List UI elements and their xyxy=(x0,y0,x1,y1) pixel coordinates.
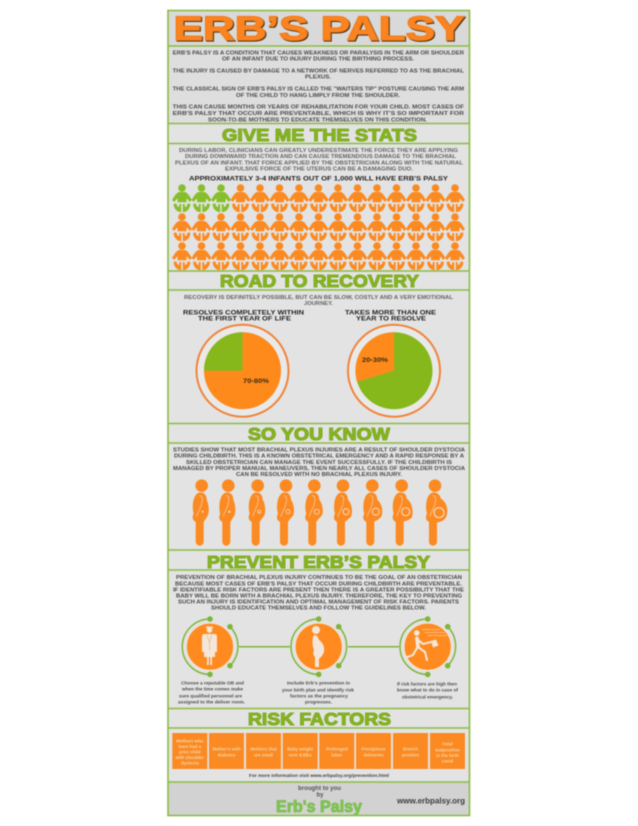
connector lines xyxy=(239,646,399,648)
pictogram: infants xyxy=(172,184,465,270)
section frame and dividers xyxy=(168,10,470,816)
risk factor boxes: Fetal xyxy=(442,742,453,747)
website url: www.erbpalsy.org xyxy=(396,796,465,806)
panel: intro text: OF AN INFANT DUE TO INJURY DURING THE BIRTHING PROCESS. xyxy=(222,56,414,62)
panel: intro text: ERB'S PALSY IS A CONDITION THAT CAUSES WEAKNESS OR PARALYSIS IN THE ARM OR SHOULDER xyxy=(173,50,464,56)
text block: prevention: IF IDENTIFIABLE RISK FACTORS ARE PRESENT THEN THERE IS A GREATER POSSIBILITY THAT THE xyxy=(173,587,464,593)
text block: recovery: RECOVERY IS DEFINITELY POSSIBLE, BUT CAN BE SLOW, COSTLY AND A VERY EMOTIONAL xyxy=(184,295,454,301)
panel: intro text: OF THE CHILD TO HANG LIMPLY FROM THE SHOULDER. xyxy=(236,93,400,99)
panel: intro text: SOON-TO-BE MOTHERS TO EDUCATE THEMSELVES ON THIS CONDITION. xyxy=(208,117,427,123)
icon: running person with bag xyxy=(400,616,456,677)
risk factor boxes: have had a xyxy=(178,744,202,749)
panel: intro text: ERB'S PALSY THAT OCCUR ARE PREVENTABLE, WHICH IS WHY IT'S SO IMPORTANT FOR xyxy=(173,111,464,117)
risk factor boxes: labor xyxy=(331,752,342,757)
text block: stats: PLEXUS OF AN INFANT. THAT FORCE APPLIED BY THE OBSTETRICIAN ALONG WITH THE NATURAL xyxy=(175,160,464,166)
pie label: more than one year xyxy=(345,309,437,322)
text block: shoulder dystocia: MANAGED BY PROPER MANUAL MANEUVERS, THEN NEARLY ALL CASES OF SHOULDER DYSTOCIA xyxy=(173,466,465,472)
risk factor boxes: diabetes xyxy=(218,752,236,757)
text block: stats xyxy=(175,148,464,172)
panel: intro text: THE CLASSICAL SIGN OF ERB'S PALSY IS CALLED THE "WAITERS TIP" POSTURE CAUSING THE ARM xyxy=(173,87,464,93)
page background panel xyxy=(168,10,470,816)
caption: choose OB: assigned to the deliver room. xyxy=(178,700,245,705)
text block: stats: EXPULSIVE FORCE OF THE UTERUS CAN BE A DAMAGING DUO. xyxy=(225,166,413,172)
panel: intro text: THE INJURY IS CAUSED BY DAMAGE TO A NETWORK OF NERVES REFERRED TO AS THE BRACHIAL xyxy=(173,69,465,75)
heading: prevent erb's palsy: PREVENT ERB’S PALSY xyxy=(207,552,430,572)
text block: prevention: PREVENTION OF BRACHIAL PLEXUS INJURY CONTINUES TO BE THE GOAL OF AN OBSTETRICIAN xyxy=(176,575,462,581)
risk factor boxes: Baby weight xyxy=(287,746,314,751)
heading: give me the stats: GIVE ME THE STATS xyxy=(222,125,417,145)
risk factor boxes: canal xyxy=(442,759,453,764)
heading: road to recovery: ROAD TO RECOVERY xyxy=(220,271,419,291)
pie chart: resolves within first year: 70-80% xyxy=(243,379,270,385)
caption: emergency: know what to do in case of xyxy=(397,688,458,693)
risk factor boxes: Mother's with xyxy=(212,746,241,751)
risk factor boxes: dystocia xyxy=(181,761,199,766)
caption: birth plan: progresses. xyxy=(305,700,332,705)
risk factor boxes: in the birth xyxy=(436,753,459,758)
heading: risk factors: RISK FACTORS xyxy=(248,709,391,729)
caption: choose OB: Choose a reputable OB and xyxy=(181,681,244,686)
pie chart: takes more than a year xyxy=(348,325,440,417)
text block: prevention xyxy=(173,575,464,612)
text block: shoulder dystocia: CAN BE RESOLVED WITH NO BRACHIAL PLEXUS INJURY. xyxy=(236,472,402,478)
logo text: Erb's Palsy xyxy=(276,798,363,816)
text block: shoulder dystocia: SKILLED OBSTETRICIAN CAN MANAGE THE EVENT SUCCESSFULLY. IF THE CHILDBIRTH IS xyxy=(186,460,452,466)
more information line: For more information visit www.erbpalsy.org/prevention.html xyxy=(249,773,389,779)
text block: shoulder dystocia xyxy=(173,447,465,478)
pie label: first year: RESOLVES COMPLETELY WITHIN xyxy=(183,309,304,316)
risk factor boxes: malposition xyxy=(435,747,460,752)
risk factor boxes: Precipitous xyxy=(362,746,386,751)
pie label: first year xyxy=(183,309,304,322)
icon: pregnant woman xyxy=(291,616,347,677)
risk factor boxes: prior child xyxy=(179,750,201,755)
panel: footer: brought to you xyxy=(298,786,341,792)
caption: birth plan: factors as the pregnancy xyxy=(290,694,348,699)
caption: birth plan: your birth plan and identify risk xyxy=(282,688,354,693)
pie label: more than one year: YEAR TO RESOLVE xyxy=(356,315,427,322)
caption: choose OB: when the time comes make xyxy=(181,687,243,692)
pregnancy progression figures xyxy=(193,479,447,546)
caption: birth plan: Include Erb's prevention in xyxy=(287,681,350,686)
panel: title xyxy=(168,10,469,48)
text block: prevention: SHOULD EDUCATE THEMSELVES AND FOLLOW THE GUIDELINES BELOW. xyxy=(211,606,426,612)
panel: footer xyxy=(168,782,469,816)
pie chart: takes more than a year: 20-30% xyxy=(362,358,389,364)
pie chart: resolves within first year xyxy=(196,325,288,417)
risk factor boxes: Breech xyxy=(403,746,418,751)
icon: doctor xyxy=(182,616,238,677)
risk factor boxes: Mothers that xyxy=(250,746,277,751)
pie label: more than one year: TAKES MORE THAN ONE xyxy=(345,309,437,316)
stat callout: APPROXIMATELY 3-4 INFANTS OUT OF 1,000 WILL HAVE ERB'S PALSY xyxy=(189,175,449,182)
caption: birth plan xyxy=(282,681,354,705)
caption: emergency: obstetrical emergency. xyxy=(402,695,453,700)
risk factor boxes: Prolonged xyxy=(326,746,348,751)
caption: choose OB xyxy=(178,681,245,705)
text block: prevention: BECAUSE MOST CASES OF ERB'S PALSY THAT OCCUR DURING CHILDBIRTH ARE PREVENTABLE. xyxy=(175,581,462,587)
caption: emergency xyxy=(397,682,458,700)
heading: so you know: SO YOU KNOW xyxy=(248,424,391,444)
panel: intro text xyxy=(168,46,469,123)
caption: emergency: If risk factors are high then xyxy=(397,682,457,687)
title: ERB’S PALSY xyxy=(174,10,465,48)
text block: shoulder dystocia: DURING CHILDBIRTH. THIS IS A KNOWN OBSTETRICAL EMERGENCY AND A RAPID RESPONSE BY A xyxy=(174,454,464,460)
text block: recovery xyxy=(184,295,454,307)
risk factor boxes: over 8.8lbs xyxy=(289,752,312,757)
text block: stats: DURING DOWNWARD TRACTION AND CAN CAUSE TREMENDOUS DAMAGE TO THE BRACHIAL xyxy=(185,154,457,160)
pie label: first year: THE FIRST YEAR OF LIFE xyxy=(198,315,292,322)
risk factor boxes: deliveries xyxy=(363,752,384,757)
risk factor boxes: position xyxy=(402,752,419,757)
risk factor boxes: Mothers who xyxy=(176,738,204,743)
text block: prevention: SUCH AN INJURY IS IDENTIFICATION AND OPTIMAL MANAGEMENT OF RISK FACTORS. PARENTS xyxy=(178,600,459,606)
text block: shoulder dystocia: STUDIES SHOW THAT MOST BRACHIAL PLEXUS INJURIES ARE A RESULT OF SHOULDER DYSTOCIA xyxy=(173,447,465,453)
risk factor boxes: are small xyxy=(254,752,273,757)
text block: prevention: BABY WILL BE BORN WITH A BRACHIAL PLEXUS INJURY. THEREFORE, THE KEY TO PREVENTING xyxy=(176,593,462,599)
panel: intro text: THIS CAN CAUSE MONTHS OR YEARS OF REHABILITATION FOR YOUR CHILD. MOST CASES OF xyxy=(173,105,465,111)
caption: choose OB: sure qualified personnel are xyxy=(179,694,242,699)
panel: footer: by xyxy=(316,792,324,798)
risk factor boxes xyxy=(172,733,465,769)
panel: intro text: PLEXUS. xyxy=(305,75,331,81)
text block: recovery: JOURNEY. xyxy=(304,301,333,307)
text block: stats: DURING LABOR, CLINICIANS CAN GREATLY UNDERESTIMATE THE FORCE THEY ARE APPLYING xyxy=(179,148,458,154)
risk factor boxes: with shoulder xyxy=(175,755,204,760)
